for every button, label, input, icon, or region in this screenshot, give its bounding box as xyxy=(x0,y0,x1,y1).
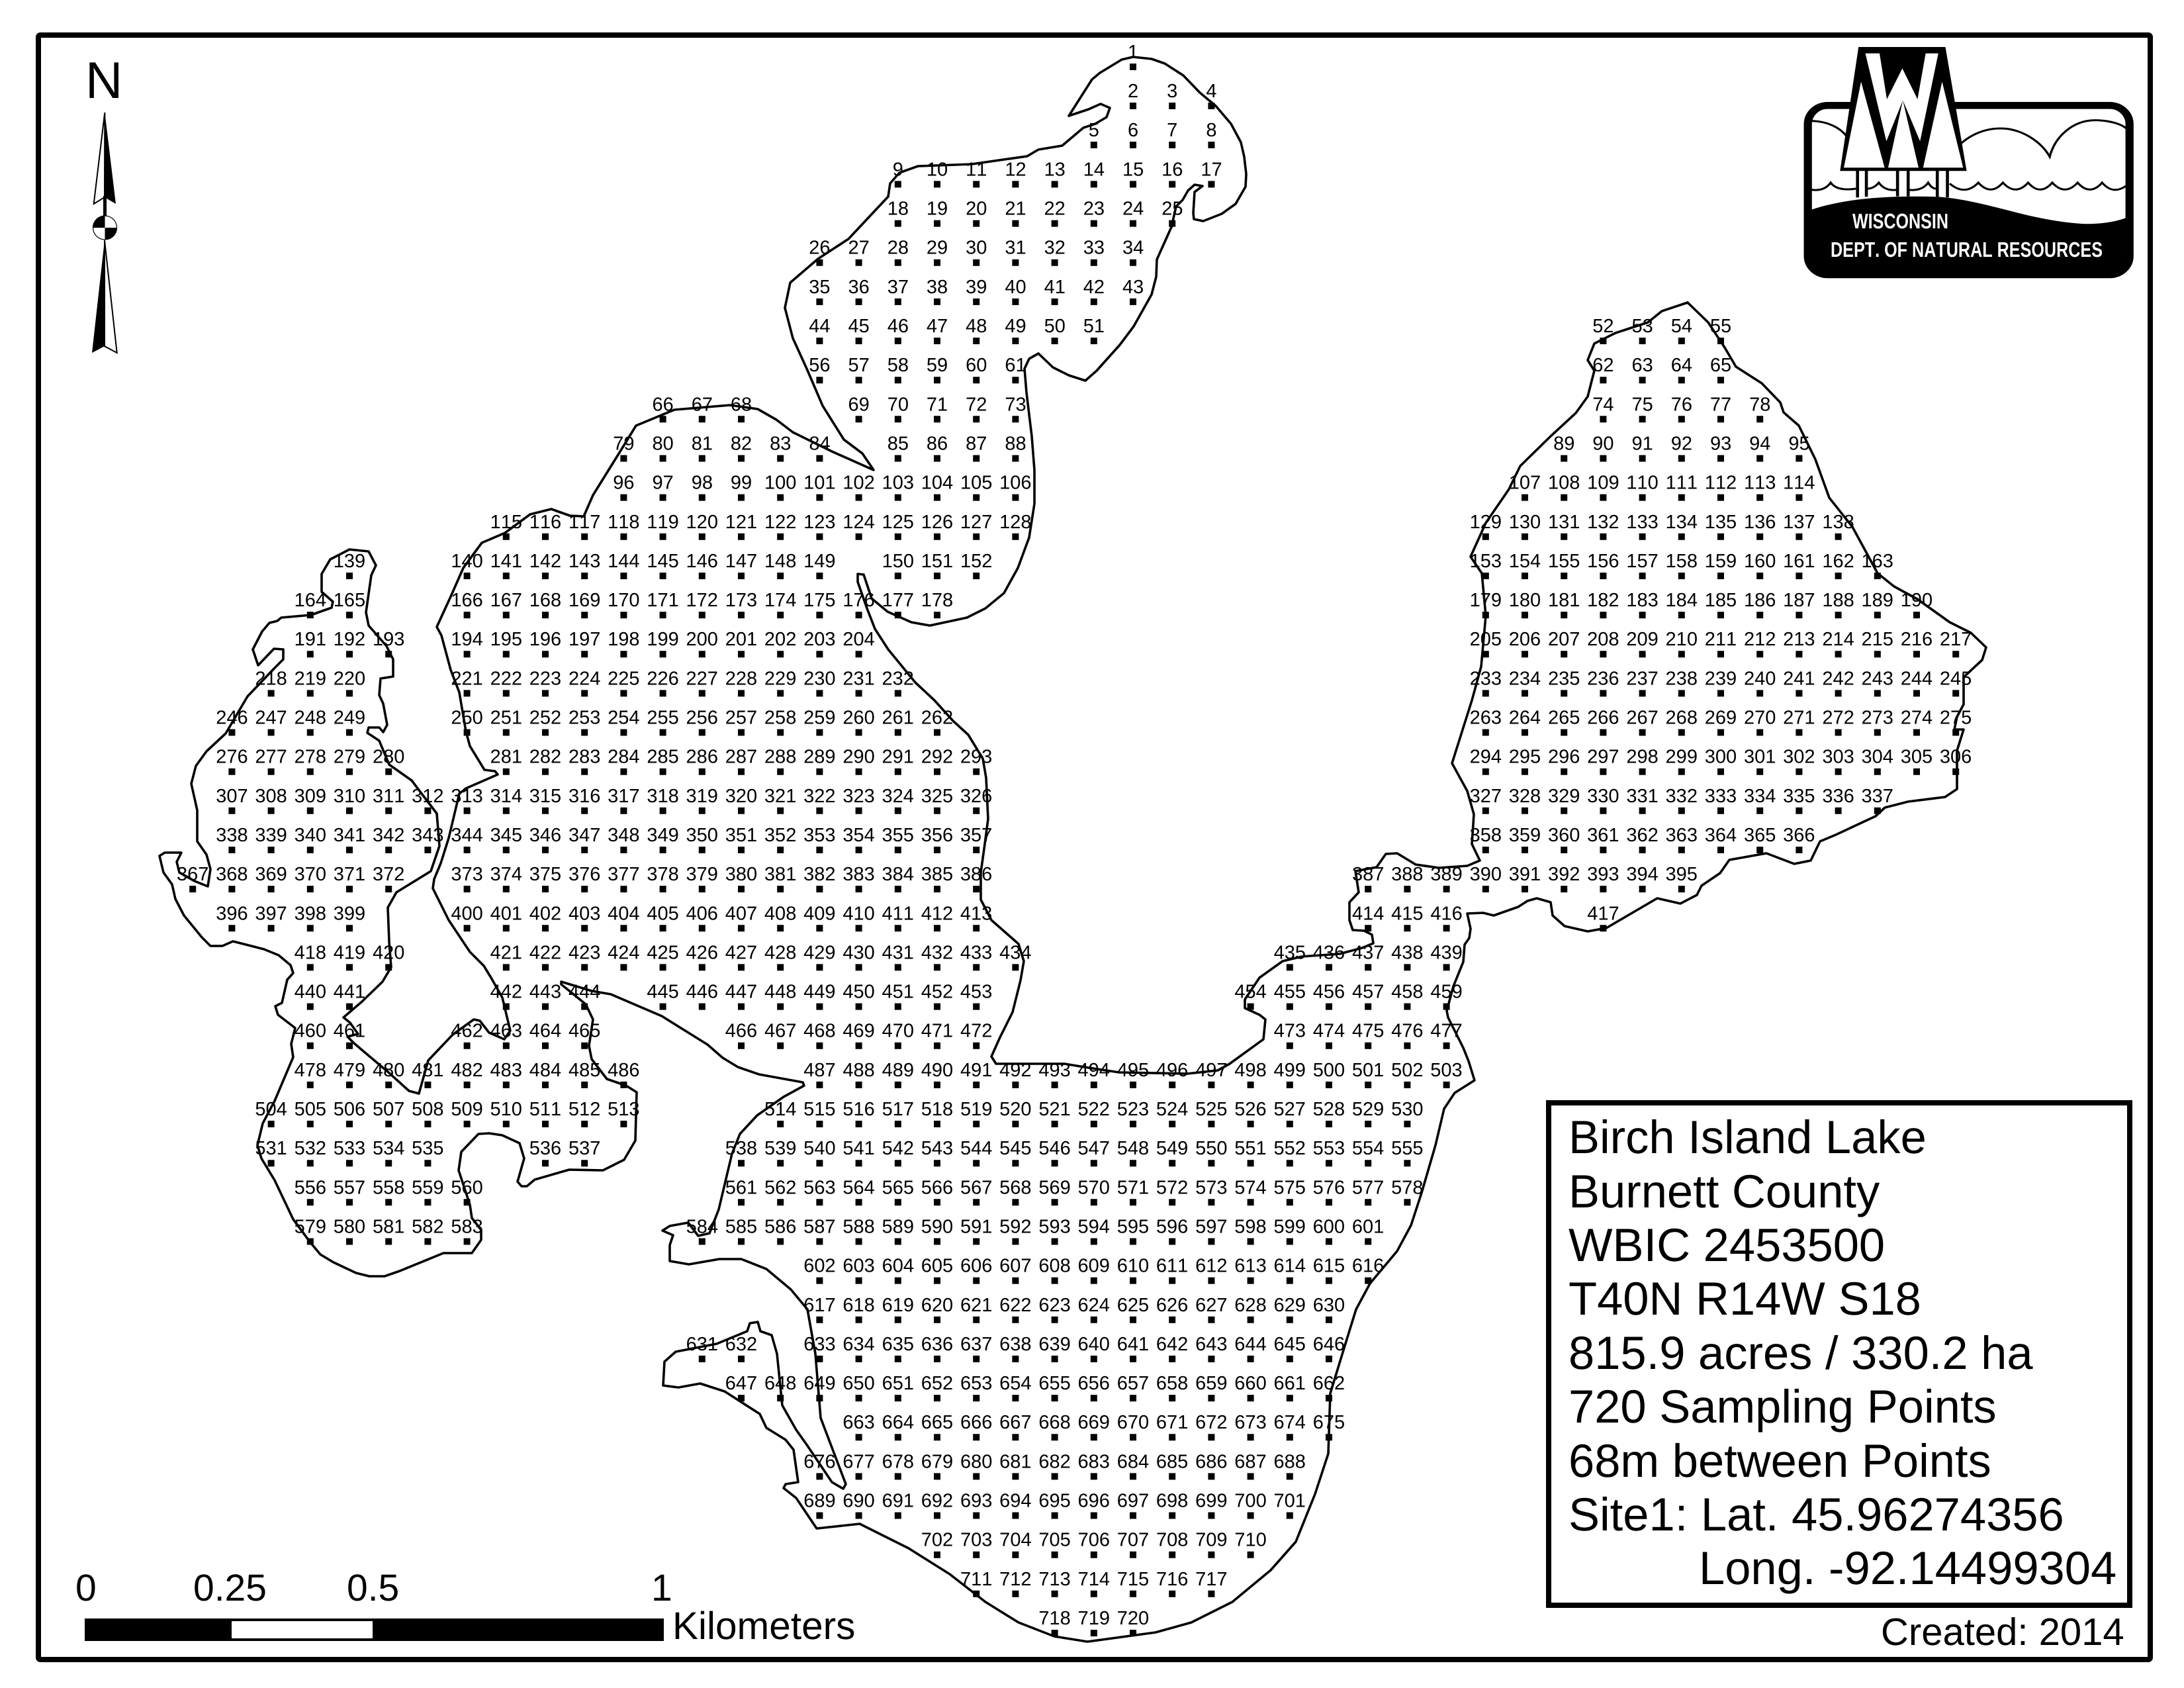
sampling points row 7 xyxy=(809,316,1731,341)
lake details text: 68m between Points xyxy=(1569,1434,1991,1487)
sampling points row 8: 62 63 64 65 xyxy=(1592,355,1731,376)
sampling points row 35: 663 664 665 666 667 668 669 670 671 672 673 674 675 xyxy=(842,1412,1345,1433)
sampling points row 33: 631 632 xyxy=(686,1334,757,1355)
sampling points row 26: 487 488 489 490 491 492 493 494 495 496 497 498 499 500 501 502 503 xyxy=(803,1060,1463,1081)
sampling points row 16: 233 234 235 236 237 238 239 240 241 242 243 244 245 xyxy=(1470,668,1972,689)
sampling points row 25: 460 461 xyxy=(295,1021,365,1042)
sampling points row 11: 96 97 98 99 xyxy=(613,473,752,494)
sampling points row 23: 418 419 420 xyxy=(295,942,404,963)
sampling points row 36: 676 677 678 679 680 681 682 683 684 685 686 687 688 xyxy=(803,1451,1306,1472)
scale labels: 1 xyxy=(651,1567,672,1609)
sampling points row 15: 205 206 207 208 209 210 211 212 213 214 215 216 217 xyxy=(1470,629,1972,650)
sampling points row 2: 5 6 7 8 xyxy=(1089,120,1216,141)
lake details text: Site1: Lat. 45.96274356 xyxy=(1569,1488,2064,1540)
sampling points row 24: 454 455 456 457 458 459 xyxy=(1234,982,1463,1003)
sampling points row 13: 150 151 152 xyxy=(882,551,992,572)
sampling points row 22: 417 xyxy=(1587,903,1619,924)
sampling points row 21: 387 388 389 390 391 392 393 394 395 xyxy=(1352,864,1698,885)
scale bar xyxy=(75,1567,855,1648)
sampling points row 25 xyxy=(295,1021,1463,1046)
sampling points row 22 xyxy=(216,903,1619,928)
sampling points row 24: 440 441 xyxy=(295,982,365,1003)
sampling points row 12 xyxy=(490,512,1854,537)
sampling points row 25: 466 467 468 469 470 471 472 xyxy=(725,1021,992,1042)
north letter: N xyxy=(85,51,122,109)
sampling points row 31: 602 603 604 605 606 607 608 609 610 611 612 613 614 615 616 xyxy=(803,1256,1384,1277)
lake outline xyxy=(159,57,1986,1642)
sampling points row 18: 294 295 296 297 298 299 300 301 302 303 304 305 306 xyxy=(1470,747,1972,768)
sampling points row 14: 179 180 181 182 183 184 185 186 187 188 189 190 xyxy=(1470,590,1933,611)
sampling points row 23: 421 422 423 424 425 426 427 428 429 430 431 432 433 434 xyxy=(490,942,1031,963)
sampling points row 10: 79 80 81 82 83 84 xyxy=(613,433,831,454)
sampling points row 34: 649 650 651 652 653 654 655 656 657 658 659 660 661 662 xyxy=(803,1373,1345,1394)
sampling points row 9 xyxy=(653,394,1770,419)
sampling points row 28: 531 532 533 534 535 xyxy=(255,1138,444,1159)
Wisconsin DNR logo: DEPT. OF NATURAL RESOURCES xyxy=(1831,238,2103,261)
sampling points row 29: 556 557 558 559 560 xyxy=(295,1177,483,1198)
sampling points row 28 xyxy=(255,1138,1423,1163)
sampling points row 18 xyxy=(216,747,1972,772)
sampling points row 7: 52 53 54 55 xyxy=(1592,316,1731,337)
sampling points row 29 xyxy=(295,1177,1423,1202)
sampling points row 34: 647 648 xyxy=(725,1373,796,1394)
sampling points row 21 xyxy=(177,864,1698,889)
north arrow xyxy=(85,51,122,353)
sampling points row 6: 35 36 37 38 39 40 41 42 43 xyxy=(809,277,1144,298)
sampling points row 13: 153 154 155 156 157 158 159 160 161 162 163 xyxy=(1470,551,1893,572)
logo text: WISCONSIN xyxy=(1852,209,1948,233)
sampling points row 13: 139 xyxy=(334,551,365,572)
sampling points row 12: 115 116 117 118 119 120 121 122 123 124 125 126 127 128 xyxy=(490,512,1031,533)
lake details text: Burnett County xyxy=(1569,1165,1880,1217)
info box xyxy=(1549,1103,2130,1605)
sampling points row 17: 263 264 265 266 267 268 269 270 271 272 273 274 275 xyxy=(1470,707,1972,728)
sampling points row 27: 514 515 516 517 518 519 520 521 522 523 524 525 526 527 528 529 530 xyxy=(764,1099,1423,1120)
lake details text: Birch Island Lake xyxy=(1569,1111,1927,1163)
sampling points row 15: 191 192 193 xyxy=(295,629,404,650)
sampling points row 39: 711 712 713 714 715 716 717 xyxy=(960,1569,1228,1590)
sampling points row 25: 473 474 475 476 477 xyxy=(1274,1021,1463,1042)
scale unit: Kilometers xyxy=(672,1605,855,1648)
sampling points row 21: 373 374 375 376 377 378 379 380 381 382 383 384 385 386 xyxy=(451,864,992,885)
sampling points row 40: 718 719 720 xyxy=(1038,1608,1149,1629)
sampling points row 30: 579 580 581 582 583 xyxy=(295,1217,483,1238)
sampling points row 33 xyxy=(686,1334,1345,1359)
lake details text: Long. -92.14499304 xyxy=(1699,1542,2116,1594)
lake details text: 815.9 acres / 330.2 ha xyxy=(1569,1327,2033,1379)
sampling points row 3: 9 xyxy=(893,159,903,180)
sampling points row 1: 2 3 4 xyxy=(1128,81,1216,102)
sampling points row 28: 536 537 xyxy=(529,1138,600,1159)
sampling points row 19 xyxy=(216,786,1893,811)
sampling points row 21: 367 368 369 370 371 372 xyxy=(177,864,404,885)
sampling points row 26: 478 479 480 481 482 483 484 485 486 xyxy=(295,1060,640,1081)
sampling points row 11: 107 108 109 110 111 112 113 114 xyxy=(1509,473,1815,494)
created date: Created: 2014 xyxy=(1881,1611,2124,1654)
sampling points row 16: 218 219 220 xyxy=(255,668,365,689)
sampling points row 32: 617 618 619 620 621 622 623 624 625 626 627 628 629 630 xyxy=(803,1295,1345,1316)
sampling points row 25: 462 463 464 465 xyxy=(451,1021,600,1042)
sampling points row 38: 702 703 704 705 706 707 708 709 710 xyxy=(921,1530,1267,1551)
sampling points row 16: 221 222 223 224 225 226 227 228 229 230 231 232 xyxy=(451,668,914,689)
sampling points row 16 xyxy=(255,668,1972,693)
sampling points row 19: 307 308 309 310 311 312 xyxy=(216,786,444,807)
sampling points row 17: 250 251 252 253 254 255 256 257 258 259 260 261 262 xyxy=(451,707,953,728)
Wisconsin DNR logo xyxy=(1808,47,2130,275)
sampling points row 7: 44 45 46 47 48 49 50 51 xyxy=(809,316,1105,337)
sampling points row 27 xyxy=(255,1099,1423,1124)
sampling points row 4: 18 19 20 21 22 23 24 25 xyxy=(887,199,1183,220)
lake details text: T40N R14W S18 xyxy=(1569,1272,1921,1325)
sampling points row 23 xyxy=(295,942,1463,967)
sampling points row 29: 561 562 563 564 565 566 567 568 569 570 571 572 573 574 575 576 577 578 xyxy=(725,1177,1423,1198)
scale labels: 0.25 xyxy=(193,1567,267,1609)
sampling points row 19: 313 314 315 316 317 318 319 320 321 322 323 324 325 326 xyxy=(451,786,992,807)
sampling points row 13: 140 141 142 143 144 145 146 147 148 149 xyxy=(451,551,836,572)
sampling points row 24 xyxy=(295,982,1463,1007)
sampling points row 9: 74 75 76 77 78 xyxy=(1592,394,1770,415)
sampling points row 20: 338 339 340 341 342 343 xyxy=(216,825,444,846)
sampling points row 12: 129 130 131 132 133 134 135 136 137 138 xyxy=(1470,512,1854,533)
scale labels: 0.5 xyxy=(347,1567,399,1609)
sampling points row 11: 100 101 102 103 104 105 106 xyxy=(764,473,1032,494)
sampling points row 24: 442 443 444 xyxy=(490,982,600,1003)
lake details text: 720 Sampling Points xyxy=(1569,1380,1997,1432)
sampling points row 17: 246 247 248 249 xyxy=(216,707,365,728)
sampling points row 27: 504 505 506 507 508 509 510 511 512 513 xyxy=(255,1099,640,1120)
sampling points row 10: 89 90 91 92 93 94 95 xyxy=(1553,433,1810,454)
sampling points row 14: 177 178 xyxy=(882,590,953,611)
sampling points row 26 xyxy=(295,1060,1463,1085)
sampling points row 9: 69 70 71 72 73 xyxy=(848,394,1026,415)
scale labels: 0 xyxy=(75,1567,97,1609)
sampling points row 20: 358 359 360 361 362 363 364 365 366 xyxy=(1470,825,1815,846)
sampling points row 22: 400 401 402 403 404 405 406 407 408 409 410 411 412 413 xyxy=(451,903,992,924)
sampling points row 15 xyxy=(295,629,1972,654)
sampling points row 23: 435 436 437 438 439 xyxy=(1274,942,1463,963)
sampling points row 11 xyxy=(613,473,1815,498)
sampling points row 8 xyxy=(809,355,1731,380)
sampling points row 14 xyxy=(295,590,1933,615)
sampling points row 20 xyxy=(216,825,1815,850)
sampling points row 22: 396 397 398 399 xyxy=(216,903,365,924)
sampling points row 22: 414 415 416 xyxy=(1352,903,1463,924)
arrow upper blade xyxy=(94,113,105,204)
sampling points row 0: 1 xyxy=(1128,42,1138,63)
sampling points row 24: 445 446 447 448 449 450 451 452 453 xyxy=(647,982,992,1003)
sampling points row 33: 633 634 635 636 637 638 639 640 641 642 643 644 645 646 xyxy=(803,1334,1345,1355)
sampling points row 14: 164 165 xyxy=(295,590,365,611)
sampling points row 3: 10 11 12 13 14 15 16 17 xyxy=(927,159,1222,180)
scale labels xyxy=(75,1567,672,1609)
sampling points row 28: 538 539 540 541 542 543 544 545 546 547 548 549 550 551 552 553 554 555 xyxy=(725,1138,1423,1159)
lake details text xyxy=(1569,1111,2116,1594)
sampling points row 10 xyxy=(613,433,1810,458)
sampling points row 13 xyxy=(334,551,1893,576)
sampling points row 17 xyxy=(216,707,1972,732)
sampling points row 30: 584 585 586 587 588 589 590 591 592 593 594 595 596 597 598 599 600 601 xyxy=(686,1217,1384,1238)
sampling points row 20: 344 345 346 347 348 349 350 351 352 353 354 355 356 357 xyxy=(451,825,992,846)
sampling points row 15: 194 195 196 197 198 199 200 201 202 203 204 xyxy=(451,629,875,650)
sampling points row 30 xyxy=(295,1217,1384,1242)
sampling points row 9: 66 67 68 xyxy=(652,394,752,415)
sampling points row 37: 689 690 691 692 693 694 695 696 697 698 699 700 701 xyxy=(803,1491,1306,1512)
sampling points row 18: 281 282 283 284 285 286 287 288 289 290 291 292 293 xyxy=(490,747,992,768)
lake details text: WBIC 2453500 xyxy=(1569,1219,1885,1271)
sampling points row 10: 85 86 87 88 xyxy=(887,433,1026,454)
sampling points row 14: 166 167 168 169 170 171 172 173 174 175 176 xyxy=(451,590,875,611)
sampling points row 19: 327 328 329 330 331 332 333 334 335 336 337 xyxy=(1470,786,1893,807)
sampling points row 5: 26 27 28 29 30 31 32 33 34 xyxy=(809,238,1144,259)
sampling points row 18: 276 277 278 279 280 xyxy=(216,747,404,768)
sampling points row 8: 56 57 58 59 60 61 xyxy=(809,355,1026,376)
